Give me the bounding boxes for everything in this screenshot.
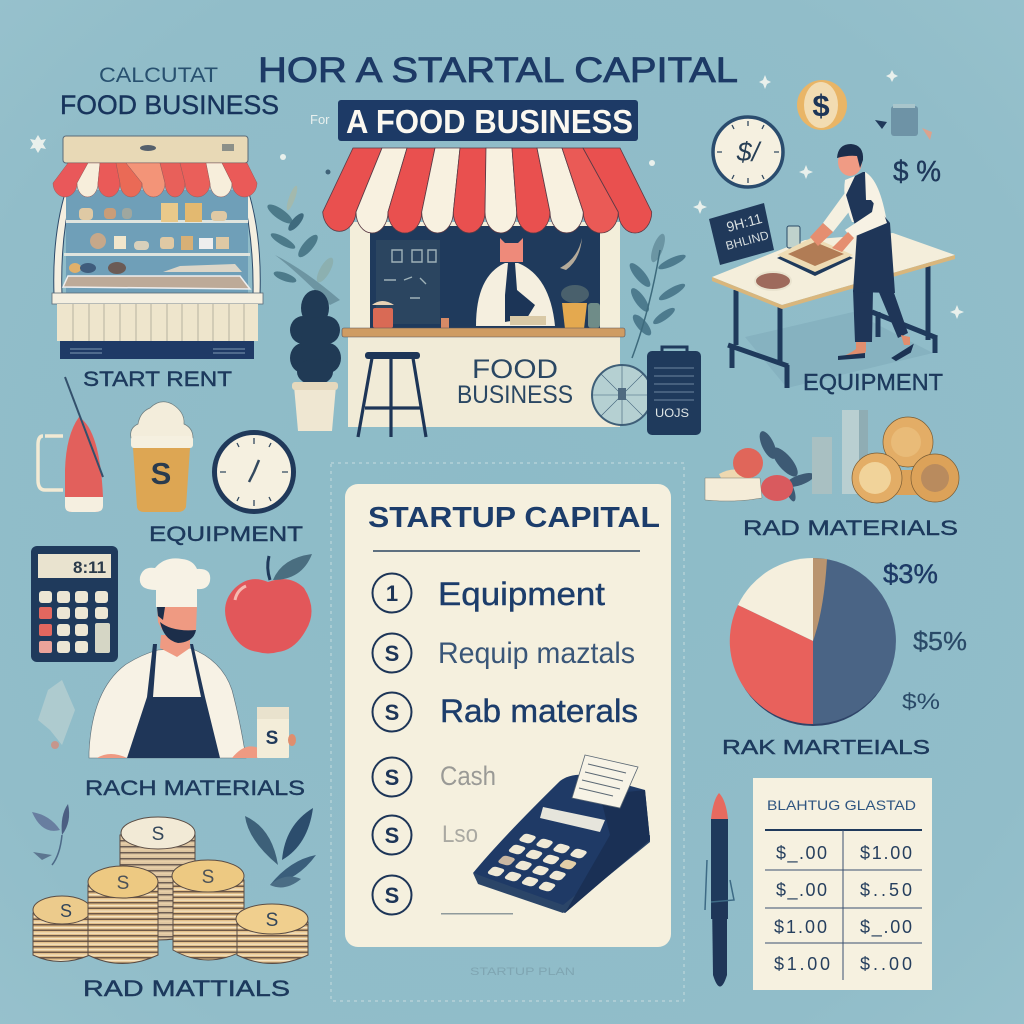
icon: small jar bbox=[875, 104, 932, 140]
coin stacks: S bbox=[266, 910, 278, 931]
label: start rent: START RENT bbox=[83, 368, 232, 391]
list item 1: 1 bbox=[386, 581, 398, 606]
list item 1: Equipment bbox=[438, 576, 605, 612]
far left stack bbox=[33, 913, 90, 962]
stall wall bbox=[350, 222, 620, 330]
icon: coffee cup: S bbox=[151, 456, 171, 491]
dashed frame around the panel bbox=[331, 463, 684, 1001]
back stack bbox=[120, 835, 195, 940]
icon: gold coin bbox=[797, 80, 847, 130]
small label: for: For bbox=[310, 112, 330, 127]
tray with food bbox=[777, 240, 853, 276]
sheet row 3: $_.00 bbox=[860, 917, 912, 938]
panel heading: STARTUP CAPITAL bbox=[368, 502, 660, 534]
mid right stack bbox=[173, 880, 244, 960]
grey bars bbox=[812, 437, 832, 494]
list item 4: Cash bbox=[440, 761, 496, 791]
budget sheet bbox=[753, 778, 932, 990]
cook shirt bbox=[844, 172, 887, 223]
right stack bbox=[237, 922, 308, 964]
pie label three: $% bbox=[902, 689, 940, 714]
stall lettering second line: BUSINESS bbox=[457, 381, 573, 409]
title banner: A FOOD BUSINESS bbox=[346, 103, 633, 140]
hands bbox=[97, 746, 258, 758]
icon: wall clock top right bbox=[713, 117, 783, 187]
list item 2 bbox=[372, 634, 635, 672]
right leaves bbox=[627, 232, 687, 358]
sheet row 3 bbox=[774, 917, 912, 938]
coin stacks: S bbox=[117, 873, 129, 894]
decorative scrap bbox=[38, 680, 75, 749]
cook feet bbox=[838, 342, 866, 358]
heading: food business left: FOOD BUSINESS bbox=[60, 90, 279, 120]
list item 5 bbox=[372, 816, 478, 854]
label: raw materials under pie: RAK MARTEIALS bbox=[722, 737, 930, 759]
cash register bbox=[473, 755, 650, 913]
icon: calculator: 8:11 bbox=[73, 558, 106, 577]
sign board on table bbox=[709, 203, 774, 265]
sign board bbox=[63, 136, 248, 163]
pie label one: $3% bbox=[883, 559, 938, 589]
icon: red jug with straw bbox=[38, 377, 103, 512]
stool bbox=[358, 352, 426, 437]
lower wall bbox=[348, 337, 620, 427]
small cup: S bbox=[266, 728, 278, 749]
sheet row 2 bbox=[776, 880, 912, 901]
raw materials food group bbox=[705, 410, 959, 503]
table legs bbox=[728, 266, 937, 388]
wheel bbox=[592, 365, 652, 425]
beard bbox=[160, 622, 196, 643]
list item 4 bbox=[372, 758, 496, 796]
sheet row 4 bbox=[774, 954, 912, 974]
label: rach materials: RACH MATERIALS bbox=[85, 777, 305, 800]
floor shadow bbox=[745, 312, 933, 388]
stall lettering: FOOD bbox=[472, 354, 558, 384]
register keys bbox=[486, 833, 588, 892]
panel: display counter shop bbox=[52, 136, 263, 359]
icon: clock left bbox=[214, 432, 294, 512]
list item 2: S bbox=[385, 641, 399, 666]
list item 6: S bbox=[385, 883, 399, 908]
sheet row 1: $1.00 bbox=[860, 843, 912, 863]
icon: calculator bbox=[31, 546, 118, 662]
sheet row 2: $..50 bbox=[860, 880, 912, 900]
glass bbox=[787, 226, 800, 248]
list item 1 bbox=[372, 574, 605, 612]
tan slice bbox=[813, 558, 827, 641]
list item 2: Requip maztals bbox=[438, 637, 635, 670]
sheet row 4: $1.00 bbox=[774, 954, 830, 974]
label: dollar percent: $ % bbox=[893, 156, 941, 188]
list item 4: S bbox=[385, 765, 399, 790]
gold rolls bbox=[890, 470, 925, 495]
sheet row 1: $_.00 bbox=[776, 843, 827, 864]
main food stall bbox=[323, 148, 701, 437]
list item 3 bbox=[372, 692, 638, 732]
label: equipment right: EQUIPMENT bbox=[803, 369, 943, 395]
sign board on table: 9H:11 bbox=[725, 210, 764, 235]
sheet row 3: $1.00 bbox=[774, 917, 827, 937]
faint plan caption below the panel: STARTUP PLAN bbox=[470, 966, 575, 978]
coin stacks: S bbox=[152, 824, 164, 845]
table with cook bbox=[712, 144, 955, 388]
plate bbox=[755, 272, 791, 290]
sheet row 4: $..00 bbox=[860, 954, 912, 974]
head bbox=[838, 148, 862, 176]
apron bbox=[127, 644, 220, 758]
small cup bbox=[257, 707, 296, 758]
list item 5: S bbox=[385, 823, 399, 848]
cream slice bbox=[738, 558, 813, 641]
list item 3: S bbox=[385, 700, 399, 725]
cream base panels bbox=[57, 304, 258, 341]
plant pot with dark foliage bbox=[290, 290, 341, 385]
counter items bbox=[373, 308, 393, 328]
dark case bbox=[647, 347, 701, 435]
icon: pen bbox=[705, 793, 734, 986]
label: rad materials right: RAD MATERIALS bbox=[743, 517, 958, 540]
budget sheet: BLAHTUG GLASTAD bbox=[767, 797, 916, 813]
cook hands bbox=[810, 223, 833, 246]
register display bbox=[540, 807, 605, 832]
chef hat bbox=[140, 558, 210, 607]
head bbox=[157, 605, 197, 640]
coin stacks: S bbox=[202, 867, 214, 888]
pie label two: $5% bbox=[913, 626, 967, 656]
table top bbox=[712, 233, 955, 305]
cook apron bbox=[846, 172, 895, 293]
decorative leaves and plant centre-left bbox=[265, 185, 341, 431]
red slice bbox=[730, 605, 813, 724]
leaves near coins bbox=[32, 804, 316, 887]
coin stacks: S bbox=[60, 901, 72, 921]
navy kick plate bbox=[60, 341, 254, 359]
chef figure bbox=[89, 558, 296, 758]
pie base thickness bbox=[732, 564, 894, 726]
icon: wall clock top right: $/ bbox=[736, 137, 762, 167]
cook back arm bbox=[823, 190, 852, 232]
list item 5: Lso bbox=[442, 821, 478, 848]
counter top bbox=[342, 328, 625, 337]
decorative sparkles bbox=[30, 70, 964, 319]
awning bbox=[323, 148, 652, 233]
list item 3: Rab materals bbox=[440, 693, 638, 729]
white jacket bbox=[89, 648, 246, 758]
list item 6 bbox=[372, 876, 513, 914]
navy slice bbox=[813, 558, 896, 724]
display awning bbox=[53, 163, 257, 197]
coin stacks bbox=[33, 817, 308, 964]
cook legs bbox=[853, 290, 908, 342]
display case body bbox=[54, 190, 72, 295]
cook front arm bbox=[845, 192, 887, 238]
sheet row 1 bbox=[776, 843, 912, 864]
mid left stack bbox=[88, 885, 158, 964]
icon: gold coin: $ bbox=[812, 88, 830, 123]
pie chart bbox=[730, 558, 896, 726]
heading: calculate: CALCUTAT bbox=[99, 64, 218, 87]
vendor figure bbox=[476, 238, 555, 326]
sign board on table: BHLIND bbox=[724, 228, 771, 253]
dark case: UOJS bbox=[655, 406, 689, 420]
neck bbox=[160, 635, 190, 657]
receipt paper bbox=[572, 755, 638, 808]
dark window bbox=[370, 226, 600, 329]
label: rad materials bottom: RAD MATTIALS bbox=[83, 976, 290, 1001]
label: equipment left: EQUIPMENT bbox=[149, 523, 303, 546]
icon: apple bbox=[225, 554, 312, 654]
counter ledge bbox=[52, 293, 263, 304]
panel: startup capital bbox=[345, 484, 671, 947]
food items on shelves bbox=[69, 203, 242, 274]
title: main heading: HOR A STARTAL CAPITAL bbox=[258, 51, 738, 90]
sheet row 2: $_.00 bbox=[776, 880, 827, 901]
icon: coffee cup bbox=[131, 402, 193, 512]
